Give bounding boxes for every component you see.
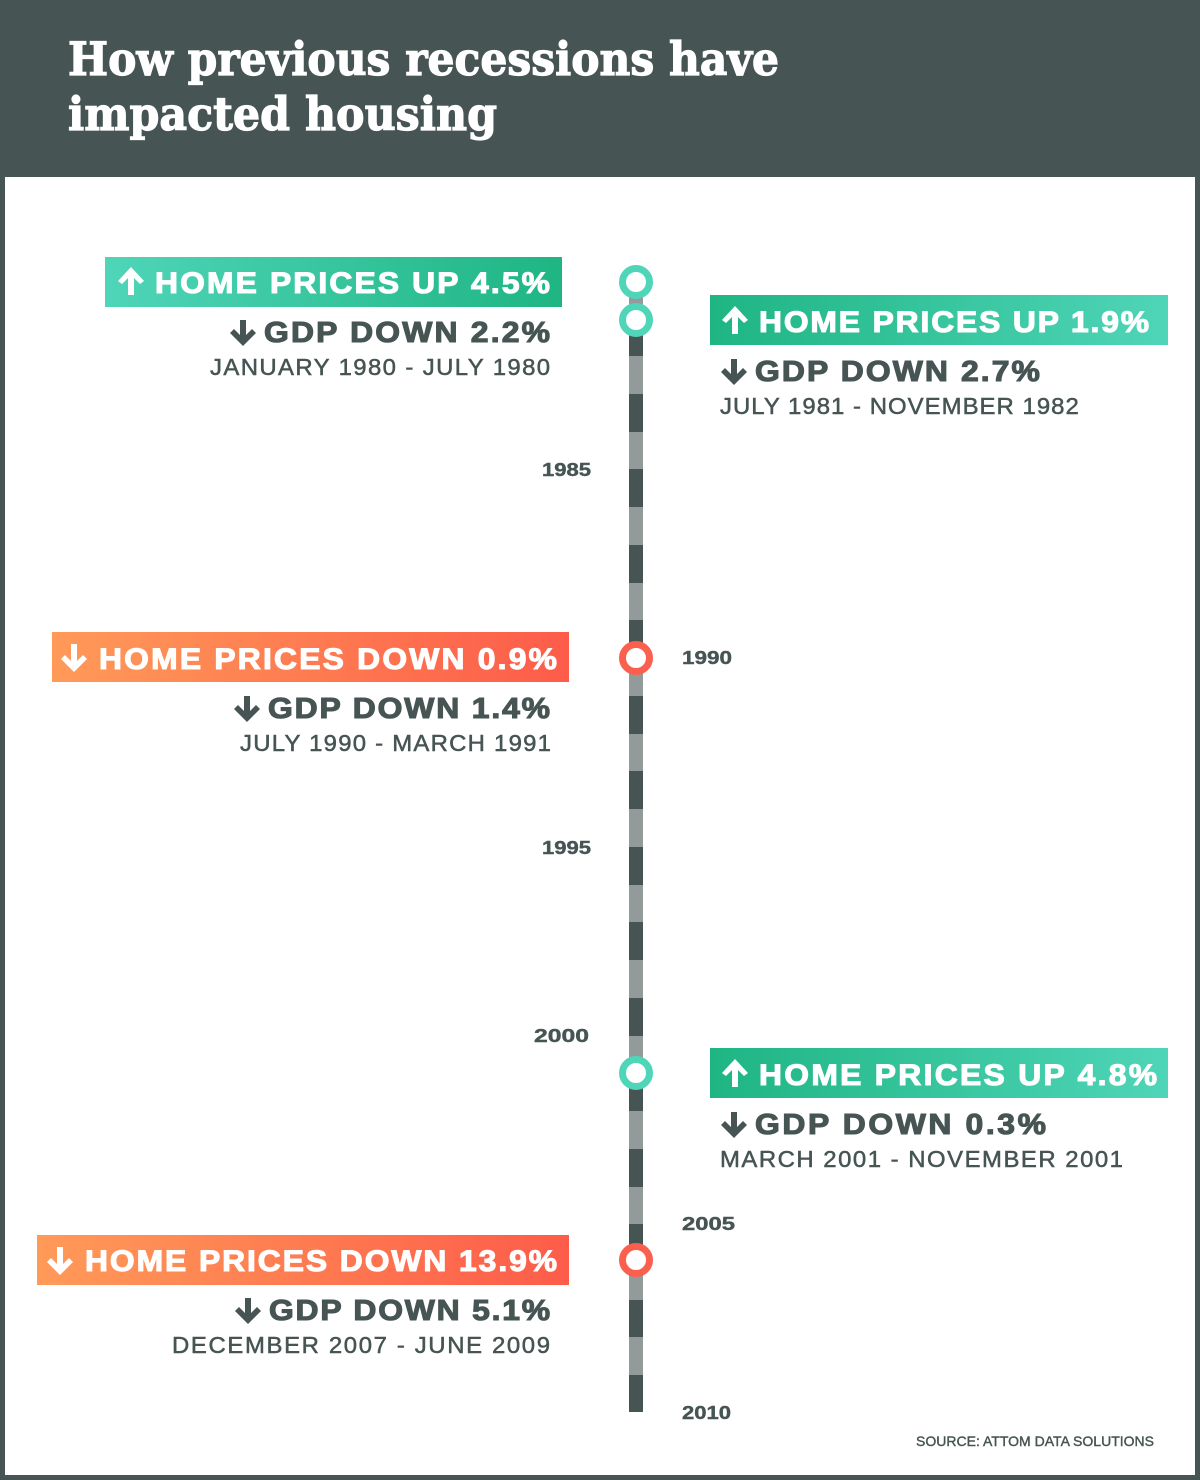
year label: 2010: 2010 xyxy=(682,1403,731,1423)
home prices banner xyxy=(105,257,562,307)
GDP line: GDP DOWN 2.2% xyxy=(264,316,550,349)
marker: 2007 recession xyxy=(622,1246,650,1274)
marker: 1981 recession xyxy=(622,306,650,334)
panel: 2007 recession xyxy=(37,1235,569,1358)
date range: MARCH 2001 - NOVEMBER 2001 xyxy=(720,1146,1123,1172)
home prices banner: HOME PRICES UP 1.9% xyxy=(759,305,1149,339)
title xyxy=(68,32,779,141)
year label: 2005: 2005 xyxy=(682,1214,735,1234)
year label: 1985: 1985 xyxy=(542,460,591,480)
GDP line: GDP DOWN 5.1% xyxy=(269,1294,550,1327)
home prices banner: HOME PRICES DOWN 0.9% xyxy=(99,642,557,676)
home prices banner xyxy=(52,632,569,682)
home prices banner: HOME PRICES DOWN 13.9% xyxy=(85,1244,557,1278)
home prices banner xyxy=(37,1235,569,1285)
source note: SOURCE: ATTOM DATA SOLUTIONS xyxy=(916,1433,1154,1449)
marker: 1990 recession xyxy=(622,644,650,672)
date range: DECEMBER 2007 - JUNE 2009 xyxy=(172,1332,550,1358)
home prices banner: HOME PRICES UP 4.5% xyxy=(155,266,550,300)
year label: 1990: 1990 xyxy=(682,648,732,668)
panel: 1981 recession xyxy=(710,295,1168,419)
GDP line: GDP DOWN 1.4% xyxy=(268,692,550,725)
home prices banner: HOME PRICES UP 4.8% xyxy=(759,1058,1157,1092)
panel: 1980 recession xyxy=(105,257,562,380)
panel: 1990 recession xyxy=(52,632,569,756)
year label: 1995: 1995 xyxy=(542,838,591,858)
GDP line: GDP DOWN 0.3% xyxy=(755,1108,1046,1141)
title: impacted housing xyxy=(68,87,497,141)
home prices banner xyxy=(710,1048,1168,1098)
panel: 2001 recession xyxy=(710,1048,1168,1172)
GDP line: GDP DOWN 2.7% xyxy=(755,355,1040,388)
date range: JANUARY 1980 - JULY 1980 xyxy=(210,354,550,380)
title: How previous recessions have xyxy=(68,32,779,86)
year label: 2000: 2000 xyxy=(534,1026,589,1046)
marker: 1980 recession xyxy=(622,268,650,296)
timeline track xyxy=(629,280,643,1412)
home prices banner xyxy=(710,295,1168,345)
date range: JULY 1990 - MARCH 1991 xyxy=(240,730,551,756)
marker: 2001 recession xyxy=(622,1060,650,1086)
date range: JULY 1981 - NOVEMBER 1982 xyxy=(720,393,1079,419)
